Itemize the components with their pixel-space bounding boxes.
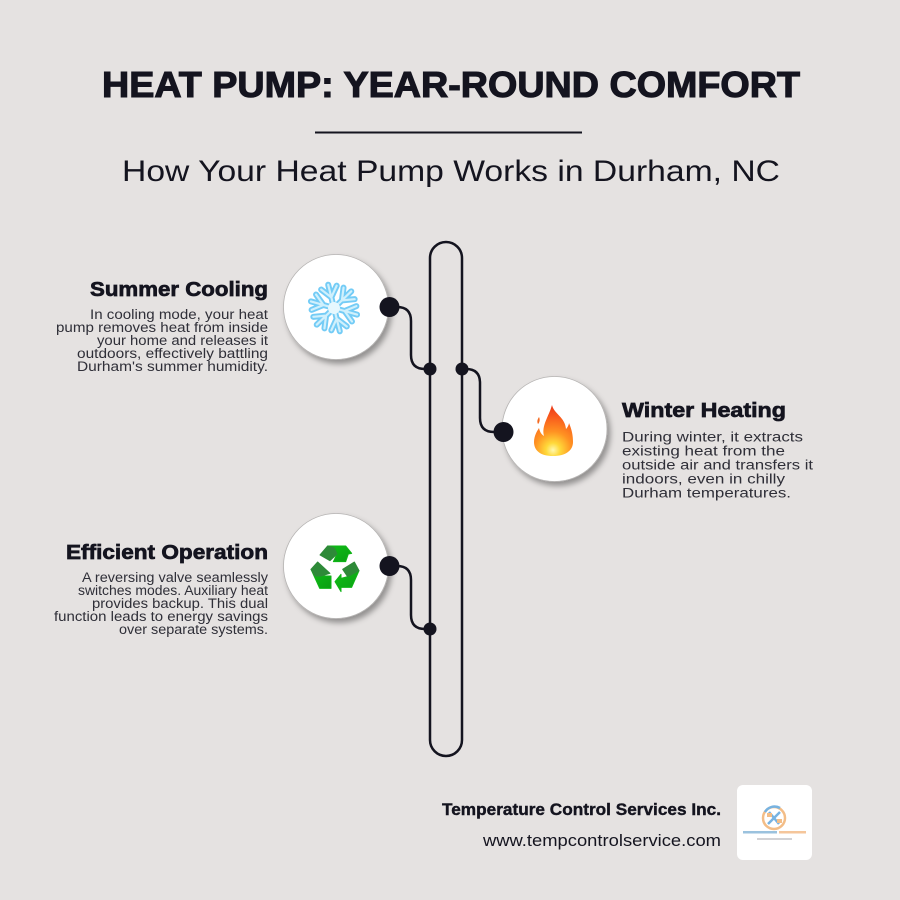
panel: summer cooling (56, 254, 388, 375)
panel: winter heating (502, 376, 813, 502)
text: summer cooling description: pump removes heat from inside (56, 320, 268, 336)
text: efficient operation description: A reversing valve seamlessly (82, 570, 269, 586)
text: efficient operation description (54, 570, 269, 638)
text: summer cooling description: Durham's summer humidity. (77, 359, 268, 375)
text: summer cooling description: In cooling mode, your heat (90, 307, 268, 323)
subtitle: How Your Heat Pump Works in Durham, NC (122, 155, 780, 188)
text: efficient operation description: provides backup. This dual (92, 596, 268, 612)
text: winter heating description: indoors, even in chilly (622, 472, 786, 488)
footer: website: www.tempcontrolservice.com (482, 832, 721, 850)
text: winter heating description: Durham temperatures. (622, 486, 791, 502)
text: winter heating description: outside air and transfers it (622, 458, 813, 474)
logo (737, 785, 812, 860)
text: winter heating description: During winter, it extracts (622, 430, 803, 446)
text: summer cooling description: outdoors, effectively battling (77, 346, 268, 362)
panel: efficient operation (54, 514, 388, 638)
connector nodes (380, 297, 514, 636)
text: efficient operation description: switches modes. Auxiliary heat (78, 583, 268, 599)
diagram track with connectors (389, 242, 503, 756)
title: HEAT PUMP: YEAR-ROUND COMFORT (102, 64, 800, 105)
text: summer cooling description (56, 307, 268, 375)
icon circle: recycle (284, 514, 388, 618)
text: winter heating description: existing heat from the (622, 444, 785, 460)
text: winter heating description (622, 430, 813, 502)
icon circle: snowflake (284, 254, 388, 360)
text: efficient operation description: function leads to energy savings (54, 609, 268, 625)
text: efficient operation description: over separate systems. (119, 622, 268, 638)
icon circle: flame (502, 376, 607, 482)
heading: winter heating: Winter Heating (622, 399, 786, 422)
text: summer cooling description: your home and releases it (97, 333, 268, 349)
footer: company name: Temperature Control Services Inc. (442, 801, 721, 819)
heading: efficient operation: Efficient Operation (66, 541, 268, 564)
heading: summer cooling: Summer Cooling (90, 278, 268, 301)
